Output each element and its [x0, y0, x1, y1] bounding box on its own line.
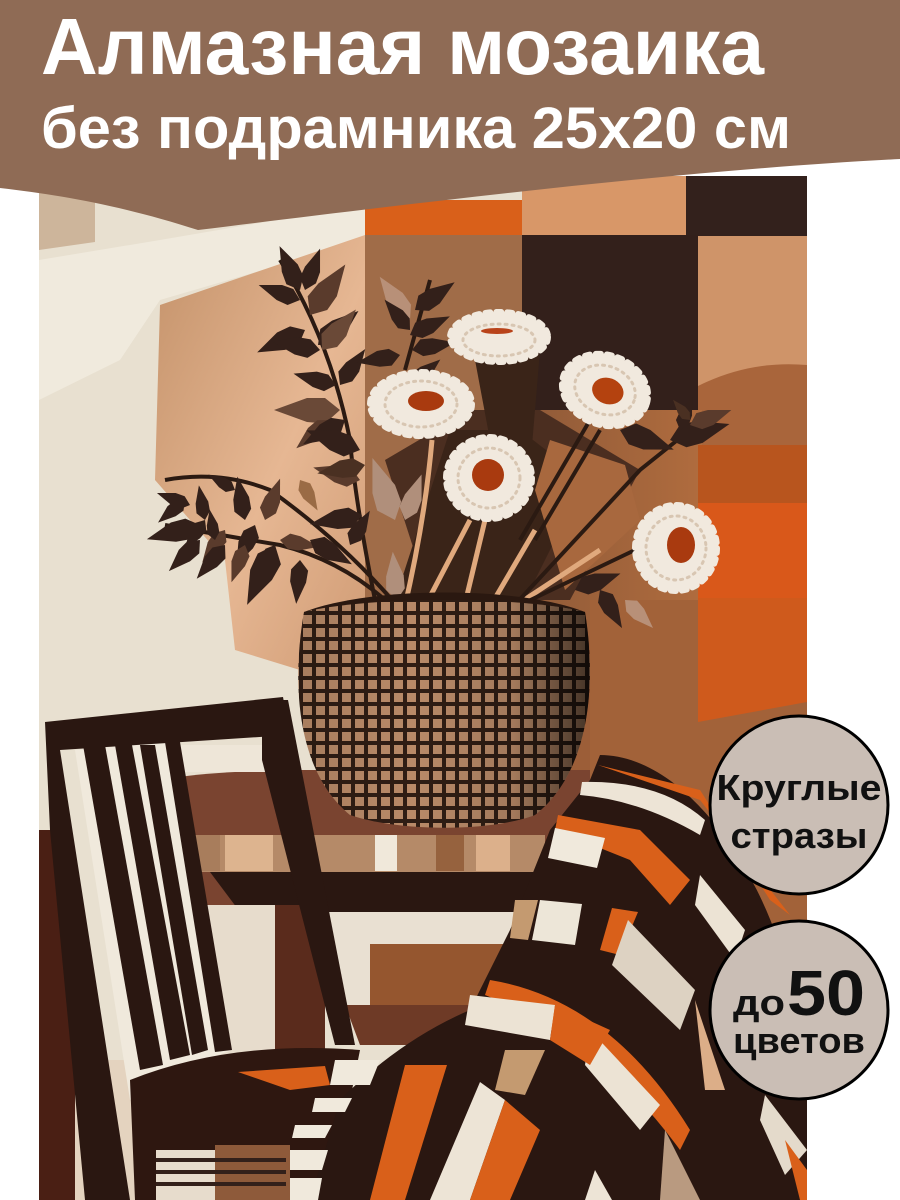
flower 4 [446, 437, 532, 519]
table [186, 770, 590, 1049]
background: cream wall [39, 192, 807, 1088]
woven basket vase [290, 592, 600, 838]
striped blanket [290, 755, 807, 1200]
flower 3 [370, 372, 472, 436]
painting: boho still life [39, 176, 807, 1200]
foliage: pale centre leaves [372, 458, 422, 595]
badge: round rhinestones [710, 716, 888, 894]
badge: up to 50 colours: 50 [787, 957, 865, 1029]
badge: up to 50 colours: до [733, 982, 785, 1023]
stems and back foliage [165, 260, 690, 612]
background: peach panel [155, 235, 365, 690]
foliage: upper left branch [257, 246, 366, 529]
foliage: lower left branches [147, 474, 370, 605]
flower 5 [635, 505, 717, 591]
badge: up to 50 colours: цветов [733, 1020, 865, 1061]
chair [39, 697, 360, 1200]
flowers [370, 312, 717, 591]
subtitle: без подрамника 25х20 см [41, 96, 791, 161]
foliage: right branch [572, 394, 734, 633]
badge: round rhinestones: Круглые [716, 767, 882, 808]
badge: up to 50 colours [710, 921, 888, 1099]
foliage: upper middle branch [361, 277, 454, 372]
header banner [0, 0, 900, 230]
title: Алмазная мозаика [41, 2, 764, 91]
badge: round rhinestones: стразы [730, 815, 868, 856]
flower 1 [450, 312, 548, 362]
background: colour blocks [365, 176, 807, 800]
flower 2 [558, 350, 651, 430]
